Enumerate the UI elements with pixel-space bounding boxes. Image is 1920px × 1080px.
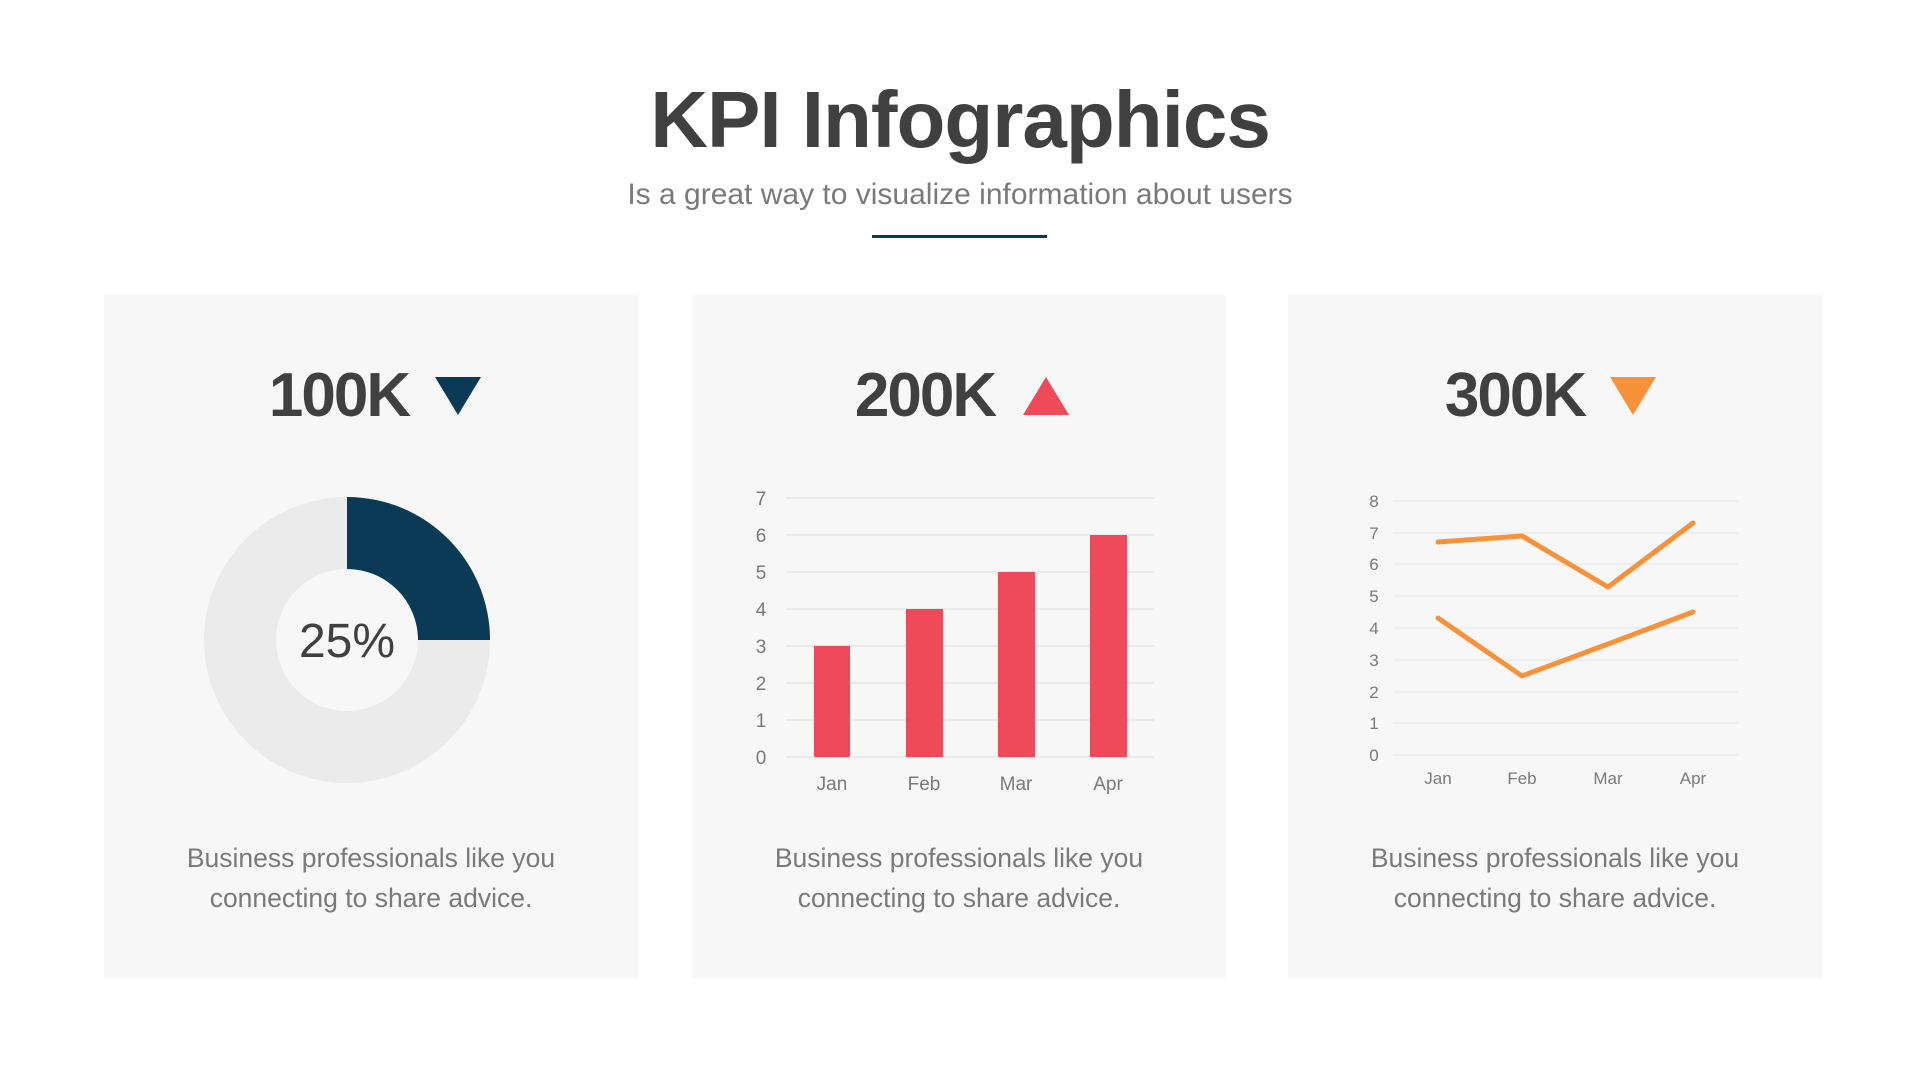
line chart: 0: [1369, 746, 1379, 765]
bar chart: 5: [756, 563, 766, 584]
line chart: 3: [1369, 651, 1379, 670]
donut chart: [204, 497, 490, 783]
bar chart: Feb: [908, 774, 940, 795]
bar chart: 7: [756, 489, 766, 510]
bar chart: 3: [756, 637, 766, 658]
donut chart: 25%: [299, 615, 395, 668]
kpi value 100K: 100K: [269, 361, 409, 430]
icon: down triangle navy: [435, 377, 481, 415]
line chart: Feb: [1507, 769, 1537, 788]
line chart: 6: [1369, 555, 1379, 574]
description: [187, 843, 555, 913]
line chart: Mar: [1593, 769, 1623, 788]
line chart: 8: [1369, 492, 1379, 511]
description: Business professionals like you: [187, 843, 555, 873]
bar chart: Apr: [1093, 774, 1123, 795]
icon: up triangle red: [1023, 377, 1069, 415]
panel: 200K bar chart: [692, 295, 1226, 978]
bar chart: 2: [756, 674, 766, 695]
description: connecting to share advice.: [210, 883, 532, 913]
panel: 300K line chart: [1288, 295, 1822, 978]
line chart: 1: [1369, 714, 1379, 733]
bar chart: 4: [756, 600, 767, 621]
bar chart: Mar: [1000, 774, 1033, 795]
bar chart: 6: [756, 526, 766, 547]
subtitle: Is a great way to visualize information about users: [627, 178, 1293, 211]
line chart: 2: [1369, 683, 1379, 702]
line chart: 7: [1369, 524, 1379, 543]
bar chart: Jan: [817, 774, 847, 795]
bar chart: 1: [756, 711, 766, 732]
description: [775, 843, 1143, 913]
bar chart: 0: [756, 748, 766, 769]
description: [1371, 843, 1739, 913]
line chart: Apr: [1680, 769, 1707, 788]
title: KPI Infographics: [650, 75, 1270, 164]
description: connecting to share advice.: [1394, 883, 1716, 913]
kpi value 300K: 300K: [1445, 361, 1585, 430]
description: Business professionals like you: [775, 843, 1143, 873]
icon: down triangle orange: [1610, 377, 1656, 415]
title underline: [872, 235, 1047, 238]
line chart: 4: [1369, 619, 1379, 638]
line chart: Jan: [1424, 769, 1452, 788]
description: connecting to share advice.: [798, 883, 1120, 913]
kpi value 200K: 200K: [855, 361, 995, 430]
panel: 100K donut: [104, 295, 638, 978]
description: Business professionals like you: [1371, 843, 1739, 873]
line chart: 5: [1369, 587, 1379, 606]
